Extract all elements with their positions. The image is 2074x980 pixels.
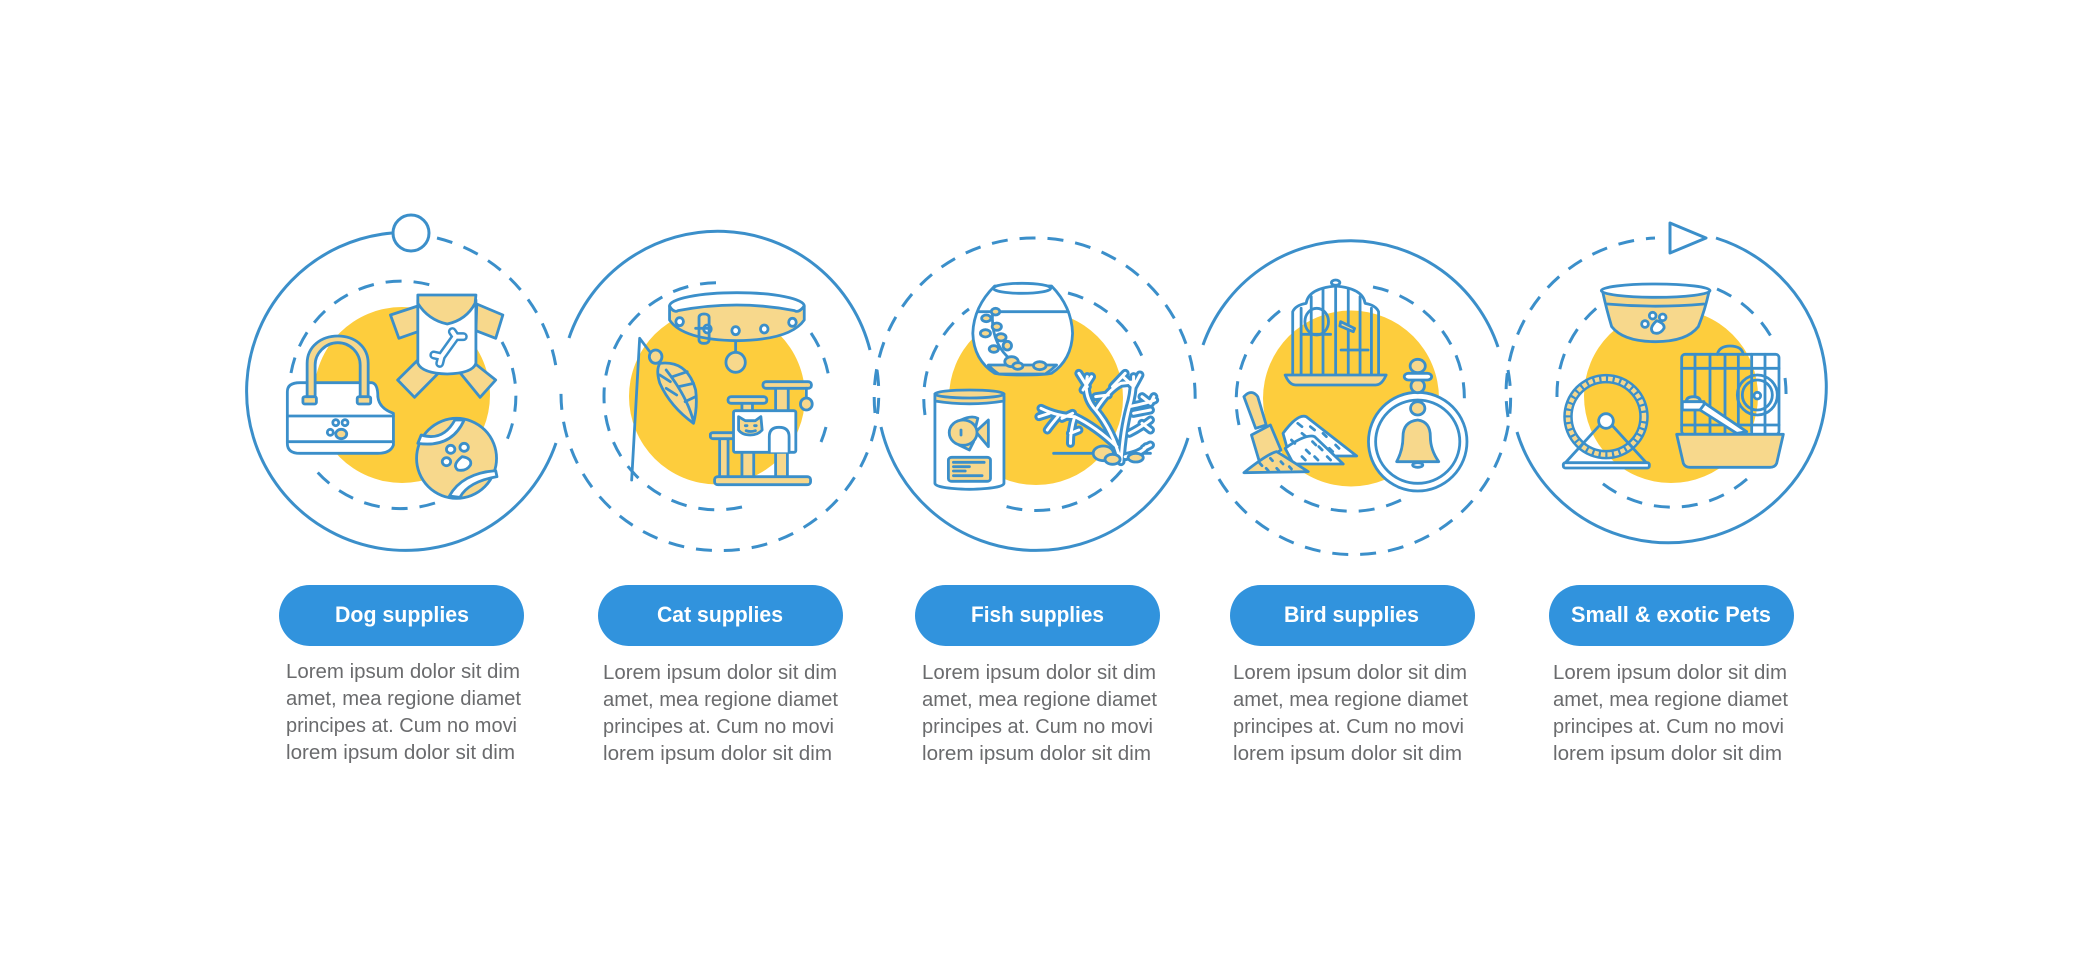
icon: bird cage: [1285, 280, 1386, 385]
icon: fish bowl: [973, 283, 1073, 375]
text block: fish supplies: principes at. Cum no movi: [922, 716, 1153, 738]
label: dog supplies: Dog supplies: [335, 602, 469, 627]
icon: food bowl: [1601, 284, 1710, 342]
icon: tennis ball: [417, 418, 497, 498]
text block: fish supplies: [922, 662, 1157, 765]
outer ring: [1198, 241, 1511, 555]
yellow blob: [949, 311, 1123, 485]
label: bird supplies: Bird supplies: [1284, 602, 1419, 627]
label: small and exotic pets: Small & exotic Pets: [1571, 602, 1771, 627]
text block: dog supplies: Lorem ipsum dolor sit dim: [286, 661, 520, 683]
text block: cat supplies: principes at. Cum no movi: [603, 716, 834, 738]
text block: cat supplies: [603, 662, 838, 765]
text block: dog supplies: amet, mea regione diamet: [286, 688, 521, 710]
yellow blob: [1263, 310, 1439, 486]
text block: cat supplies: lorem ipsum dolor sit dim: [603, 743, 832, 765]
text block: dog supplies: principes at. Cum no movi: [286, 715, 517, 737]
label: small and exotic pets: [1549, 585, 1794, 646]
yellow blob: [1584, 309, 1758, 483]
text block: bird supplies: principes at. Cum no movi: [1233, 716, 1464, 738]
text block: bird supplies: amet, mea regione diamet: [1233, 689, 1468, 711]
label: fish supplies: Fish supplies: [971, 602, 1104, 627]
text block: dog supplies: lorem ipsum dolor sit dim: [286, 742, 515, 764]
text block: bird supplies: [1233, 662, 1468, 765]
icons: small pet items: [1563, 284, 1783, 468]
icons: fish items: [935, 283, 1155, 489]
panel: cat supplies: [561, 231, 879, 551]
inner dashed ring: [1557, 289, 1786, 507]
icons: bird items: [1244, 280, 1467, 491]
text block: small and exotic pets: [1553, 662, 1788, 765]
outer ring: [247, 233, 557, 550]
icon: feather wand: [632, 338, 696, 480]
icon: dog coat: [390, 295, 503, 397]
panel: dog supplies: [247, 215, 557, 550]
inner dashed ring: [924, 293, 1145, 511]
text block: small and exotic pets: Lorem ipsum dolor sit dim: [1553, 662, 1787, 684]
text block: bird supplies: lorem ipsum dolor sit dim: [1233, 743, 1462, 765]
icon: hanging bell: [1368, 359, 1467, 491]
text block: small and exotic pets: lorem ipsum dolor sit dim: [1553, 743, 1782, 765]
icon: litter and scoop: [1244, 392, 1357, 473]
outer ring: [561, 231, 879, 551]
text block: fish supplies: Lorem ipsum dolor sit dim: [922, 662, 1156, 684]
icons: cat items: [632, 293, 812, 485]
outer ring: [874, 238, 1195, 550]
icon: coral: [1039, 373, 1155, 464]
icons: dog items: [287, 295, 503, 498]
yellow blob: [629, 308, 805, 484]
icon: carrier bag: [287, 336, 393, 453]
icon: cat tree: [710, 382, 812, 485]
text block: small and exotic pets: amet, mea regione diamet: [1553, 689, 1788, 711]
start dot: [393, 215, 429, 251]
label: cat supplies: Cat supplies: [657, 602, 783, 627]
text block: fish supplies: lorem ipsum dolor sit dim: [922, 743, 1151, 765]
text block: fish supplies: amet, mea regione diamet: [922, 689, 1157, 711]
panel: small and exotic pets: [1506, 223, 1826, 543]
text block: cat supplies: amet, mea regione diamet: [603, 689, 838, 711]
inner dashed ring: [604, 283, 829, 510]
icon: hamster wheel: [1563, 379, 1649, 468]
label: bird supplies: [1230, 585, 1475, 646]
text block: cat supplies: Lorem ipsum dolor sit dim: [603, 662, 837, 684]
inner dashed ring: [291, 281, 516, 509]
panel: bird supplies: [1198, 241, 1511, 555]
label: dog supplies: [279, 585, 524, 646]
icon: hamster cage: [1677, 346, 1783, 467]
icon: collar: [670, 293, 804, 372]
end arrow: [1670, 223, 1706, 253]
label: fish supplies: [915, 585, 1160, 646]
text block: dog supplies: [286, 661, 521, 764]
yellow blob: [314, 307, 490, 483]
label: cat supplies: [598, 585, 843, 646]
inner dashed ring: [1236, 287, 1464, 511]
icon: fish food can: [935, 390, 1004, 489]
panel: fish supplies: [874, 238, 1195, 550]
outer ring: [1506, 238, 1826, 543]
text block: bird supplies: Lorem ipsum dolor sit dim: [1233, 662, 1467, 684]
text block: small and exotic pets: principes at. Cum no movi: [1553, 716, 1784, 738]
